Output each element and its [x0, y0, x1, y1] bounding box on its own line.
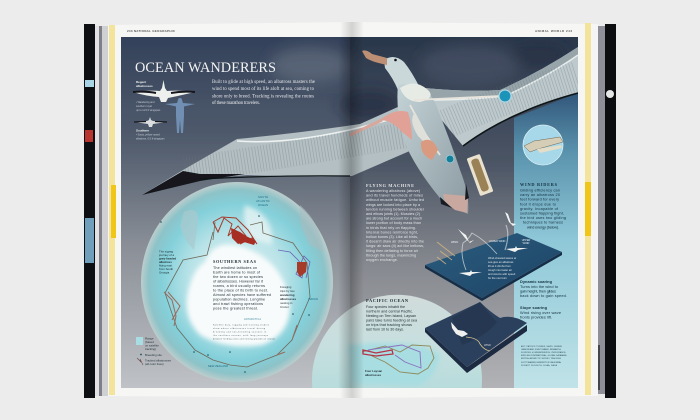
small print: source notes: Satellite data, tagging and tracking studies — [213, 324, 269, 326]
page gutter shading — [340, 22, 364, 398]
text: pacific ocean body: on trips that tracking shows — [366, 323, 412, 327]
beak — [362, 50, 387, 65]
text: southern seas body: the two dozen or so species — [213, 275, 263, 279]
text: dynamic soaring note: for the next turn — [488, 276, 507, 280]
storm clouds — [270, 43, 570, 120]
text: slope soaring: Slope soaring — [520, 305, 548, 310]
running head: right: ANIMAL WORLD 243 — [535, 29, 572, 33]
icon: large albatross — [133, 80, 195, 102]
small print: source notes: between feeding areas and nesting grounds on islands — [213, 338, 275, 340]
text: wandering albatross size: southern royal — [136, 105, 152, 108]
map legend: on satellite — [145, 344, 159, 348]
text: wind riders body: foot it drops due to — [520, 202, 556, 206]
foraging tracks: wandering albatross — [278, 250, 310, 278]
head and neck — [384, 57, 420, 90]
label: south atlantic ocean: OCEAN — [258, 203, 268, 207]
text: introduction — [212, 80, 315, 106]
dark wingtip — [142, 171, 245, 195]
annotation: wandering albatross: trips by two — [280, 289, 295, 293]
text: southern seas body: roams, a bird usually returns — [213, 284, 265, 288]
text: dynamic soaring note: sea give an albatross — [488, 260, 514, 264]
label: lower wind / upper wind — [489, 239, 530, 245]
text: slope soaring: fronts provides lift. — [520, 314, 552, 320]
sky background: right page — [350, 37, 578, 388]
label: four laysan albatrosses — [365, 370, 382, 376]
annotation: grey-headed albatross: Georgia — [159, 270, 170, 274]
text: flying machine body: A wandering albatross (above) — [366, 189, 420, 193]
breeding tracks: south georgia — [213, 217, 257, 244]
book edge: right page stack — [591, 24, 616, 398]
text: southern seas body: population declines. Longline — [213, 298, 265, 302]
diagram: dynamic soaring ocean block — [425, 212, 562, 301]
text: wind riders body: wind energy (below). — [527, 225, 559, 229]
text: wandering albatross size: • Wandering and — [136, 101, 155, 104]
annotation: wandering albatross — [280, 286, 296, 308]
text: pacific ocean body: Four species inhabit the — [366, 305, 405, 309]
text: sooty size: albatross, 6.5 ft wingspan — [136, 138, 165, 140]
annotation: wandering albatross: albatrosses — [280, 297, 296, 301]
text: flying machine body: without muscle fatigue. Unfurled — [366, 198, 424, 202]
text: southern seas body: to the place of its birth to nest. — [213, 288, 268, 292]
small print: source notes — [213, 324, 275, 340]
text: dynamic soaring note: lift as it climbs from — [488, 264, 512, 268]
organ — [421, 140, 438, 160]
text: pacific ocean body: pairs take turns feeding at sea — [366, 318, 418, 322]
heading: pacific ocean: PACIFIC OCEAN — [366, 298, 409, 303]
icon: soaring albatross 4 — [506, 246, 528, 252]
yellow edge strip: left — [109, 25, 116, 395]
text: slope soaring — [520, 305, 561, 320]
text: slope soaring: Wind rising over wave — [520, 310, 561, 315]
map legend: Range — [145, 336, 154, 340]
text: dynamic soaring: Turns into the wind to — [520, 284, 558, 289]
text: flying machine body: through the lungs, maximizing — [366, 253, 416, 257]
text: introduction: wind to spend most of its life aloft at sea, coming to — [212, 87, 315, 92]
text: pacific ocean body — [366, 305, 418, 332]
text: wind riders body — [520, 188, 566, 229]
map legend: (all color lines) — [145, 362, 164, 366]
small print: source notes: breeding and non-breeding seasons in — [213, 332, 266, 334]
size comparison: albatrosses and human — [133, 80, 195, 140]
annotation: wandering albatross: Crozet — [280, 305, 289, 309]
text: flying machine body: in birds that rely on flapping. — [366, 226, 416, 230]
label: four laysan albatrosses: Four Laysan — [365, 369, 382, 373]
text: dynamic soaring note: trough into faster air — [488, 268, 512, 272]
text: wandering albatross size: up to 11.5 ft wingspan — [136, 109, 161, 112]
text: southern seas body: The windiest latitudes on — [213, 266, 257, 270]
text: dynamic soaring — [520, 279, 567, 298]
annotation: wandering albatross: nesting in — [280, 301, 293, 305]
annotation: grey-headed albatross: journey of a — [158, 253, 174, 257]
continents — [180, 210, 198, 250]
map legend — [136, 336, 171, 366]
map legend: tracking) — [145, 347, 156, 351]
gutter shadow — [338, 37, 364, 388]
text: flying machine body: lower portion of body mass than — [366, 221, 421, 225]
small print: credits: SOURCES: H. WEIMERSKIRCH, CNRS FRANCE; — [521, 351, 566, 354]
flight path — [466, 337, 490, 351]
diagram: slope soaring wave block — [425, 302, 527, 373]
text: wind riders body: sustained flapping flight, — [520, 212, 564, 216]
wind arrows — [437, 242, 455, 264]
albatross illustration — [142, 47, 578, 214]
callout: air sac — [446, 155, 454, 163]
tail — [443, 194, 468, 213]
text: pacific ocean body: last from 10 to 30 days. — [366, 328, 404, 332]
eye — [394, 59, 397, 61]
text: flying machine body: wings are locked into place by a — [366, 203, 421, 207]
text: southern seas body: Almost all species have suffered — [213, 293, 271, 297]
wrist joint inset — [523, 125, 563, 165]
open book pages — [108, 22, 592, 398]
south atlantic white patches — [244, 205, 272, 245]
title: OCEAN WANDERERS — [135, 60, 276, 76]
small print: credits: BRITISH ANTARCTIC SURVEY, TRACKING — [521, 357, 561, 360]
text: wind riders body: carry an albatross 20 — [520, 193, 560, 197]
label: wave: WIND — [484, 343, 491, 347]
small print: credits: BIRDLIFE INTERNATIONAL, GLOBAL DATABASE; — [521, 354, 567, 357]
label: lower wind / upper wind: WIND — [523, 242, 530, 245]
text: dynamic soaring: Dynamic soaring — [520, 279, 553, 284]
text: flying machine body: lungs: air sacs (4) act like bellows, — [366, 244, 424, 248]
text: wind riders body: Gliding efficiency can — [520, 188, 560, 192]
text: flying machine body: tendon running between shoulder — [366, 207, 425, 211]
text: wind riders body: the bird uses two gliding — [520, 216, 566, 220]
text: dynamic soaring: gain height, then glides — [520, 288, 556, 294]
right wing — [420, 47, 578, 146]
map legend: Breeding site — [145, 353, 162, 357]
icon: small albatross — [134, 117, 167, 127]
text: flying machine body — [366, 189, 425, 262]
map legend: (based — [145, 340, 154, 344]
label: new zealand: NEW ZEALAND — [208, 364, 228, 368]
label: lower wind / upper wind: LOWER WIND — [489, 240, 505, 243]
text: southern seas body — [213, 266, 271, 310]
muscle — [380, 111, 412, 140]
label: regent albatross: Regent — [136, 80, 146, 84]
text: pacific ocean body: Nesting on Tern Island, Laysan — [366, 314, 416, 318]
small print: credits: ART: PATRICK TURNER, MAPS: DEBBIE — [521, 345, 563, 348]
text: flying machine body: oxygen exchange. — [366, 258, 398, 262]
text: flying machine body: filling then deflating to force air — [366, 249, 419, 253]
annotation: grey-headed albatross: albatross — [159, 260, 172, 264]
annotation: grey-headed albatross: from South — [159, 267, 174, 271]
label: indian ocean: INDIAN — [308, 297, 318, 301]
albatross tracks: grey-headed — [165, 222, 310, 367]
text: introduction: shore only to breed. Tracking is revealing the routes — [212, 94, 314, 100]
text: southern seas body: Earth are home to most of — [213, 270, 261, 274]
text: southern seas body: of albatrosses. However far it — [213, 280, 263, 284]
text: flying machine body: Internal bones reinforce light, — [366, 230, 418, 234]
globe: southern seas — [141, 182, 333, 382]
small print: credits — [521, 345, 567, 367]
illustration panel — [121, 37, 578, 388]
text: dynamic soaring note: Wind-sheared waves at — [488, 256, 516, 260]
small print: credits: ROBERT SUDDETH; NOAA; NASA — [521, 364, 558, 367]
feathers — [185, 135, 405, 170]
heading: flying machine: FLYING MACHINE — [366, 183, 414, 188]
text: flying machine body: and its travel hundreds of miles — [366, 194, 423, 198]
annotation: grey-headed albatross — [158, 250, 176, 274]
label: south atlantic ocean — [256, 196, 270, 206]
label: sooty: Southern — [136, 128, 149, 132]
book edge: left page stack — [84, 24, 108, 398]
glide path — [462, 233, 497, 270]
label: four laysan albatrosses: albatrosses — [365, 373, 381, 377]
icon: soaring albatross 3 — [459, 270, 482, 276]
skeleton and air sacs — [400, 83, 431, 102]
annotation: grey-headed albatross: The zigzag — [159, 250, 174, 254]
antarctica — [187, 245, 290, 346]
text: dynamic soaring note — [488, 256, 516, 280]
label: south atlantic ocean: SOUTH — [258, 195, 268, 199]
panel: wind riders background — [514, 93, 578, 388]
text: wind riders body: gravity. Incapable of — [520, 207, 559, 211]
running head: left: 243 NATIONAL GEOGRAPHIC — [127, 29, 176, 33]
left wing — [142, 106, 412, 195]
small print: source notes: the southern oceans, with long journeys — [213, 334, 268, 337]
icon: soaring albatross 2 — [505, 212, 516, 226]
text: wandering albatross size — [136, 101, 161, 112]
text: pacific ocean body: northern and central Pacific. — [366, 310, 413, 314]
label: regent albatross: albatrosses — [136, 84, 153, 88]
globe: pacific ocean — [312, 295, 482, 388]
text: flying machine body: hollow bones (3). Like all birds, — [366, 235, 418, 239]
text: introduction: Built to glide at high speed, an albatross masters the — [212, 80, 315, 85]
text: flying machine body: are strong but account for a much — [366, 217, 422, 221]
text: wind riders body: techniques to harness — [523, 221, 563, 225]
body — [397, 84, 468, 214]
map legend: Tracked albatrosses — [145, 358, 171, 362]
small print: source notes: show where albatrosses travel during — [213, 327, 265, 330]
text: flying machine body: and elbow joints (1). Muscles (2) — [366, 212, 420, 216]
bone specimen inset — [467, 154, 493, 196]
sky background: left page — [121, 37, 350, 388]
label: wind speed: WIND — [451, 240, 458, 244]
label: lower wind / upper wind: UPPER — [522, 239, 530, 242]
text: wind riders body: feet forward for every — [520, 198, 559, 202]
label: antarctica: ANTARCTICA — [244, 318, 261, 321]
text: sooty size — [136, 134, 165, 140]
label: regent albatross — [136, 80, 153, 88]
annotation: wandering albatross: Foraging — [280, 285, 292, 289]
yellow edge strip: right — [585, 23, 591, 395]
small print: credits: GIBBONS AND JOHN TOMANIO, RESEARCH: — [521, 348, 561, 351]
text: southern seas body: pose the greatest threat. — [213, 306, 258, 310]
text: southern seas body: and trawl fishing operations — [213, 302, 263, 306]
text: dynamic soaring: back down to gain speed. — [520, 293, 567, 298]
heading: southern seas: SOUTHERN SEAS — [213, 259, 257, 264]
annotation: grey-headed albatross: grey-headed — [159, 256, 176, 260]
small print: credits: SCOTT SHAFFER, UNIVERSITY OF CALIFORNIA; — [521, 361, 561, 364]
annotation: grey-headed albatross: flying east — [159, 264, 172, 268]
text: flying machine body: it doesn't draw air directly into the — [366, 240, 424, 244]
breeding sites — [160, 215, 310, 373]
icon: gliding albatross — [451, 322, 468, 337]
text: sooty size: • Sooty, yellow-nosed — [136, 134, 160, 136]
label: south atlantic ocean: ATLANTIC — [256, 199, 270, 203]
annotation: wandering albatross: wandering — [279, 293, 295, 297]
callout: wing tendon — [499, 90, 511, 102]
icon: soaring albatross 1 — [458, 229, 474, 243]
text: introduction: of these marathon travelers. — [212, 101, 260, 106]
text: dynamic soaring note: and returns with speed — [488, 272, 516, 276]
icon: human silhouette — [165, 98, 195, 133]
tracks: laysan albatross — [362, 345, 434, 374]
heading: wind riders: WIND RIDERS — [520, 182, 558, 187]
